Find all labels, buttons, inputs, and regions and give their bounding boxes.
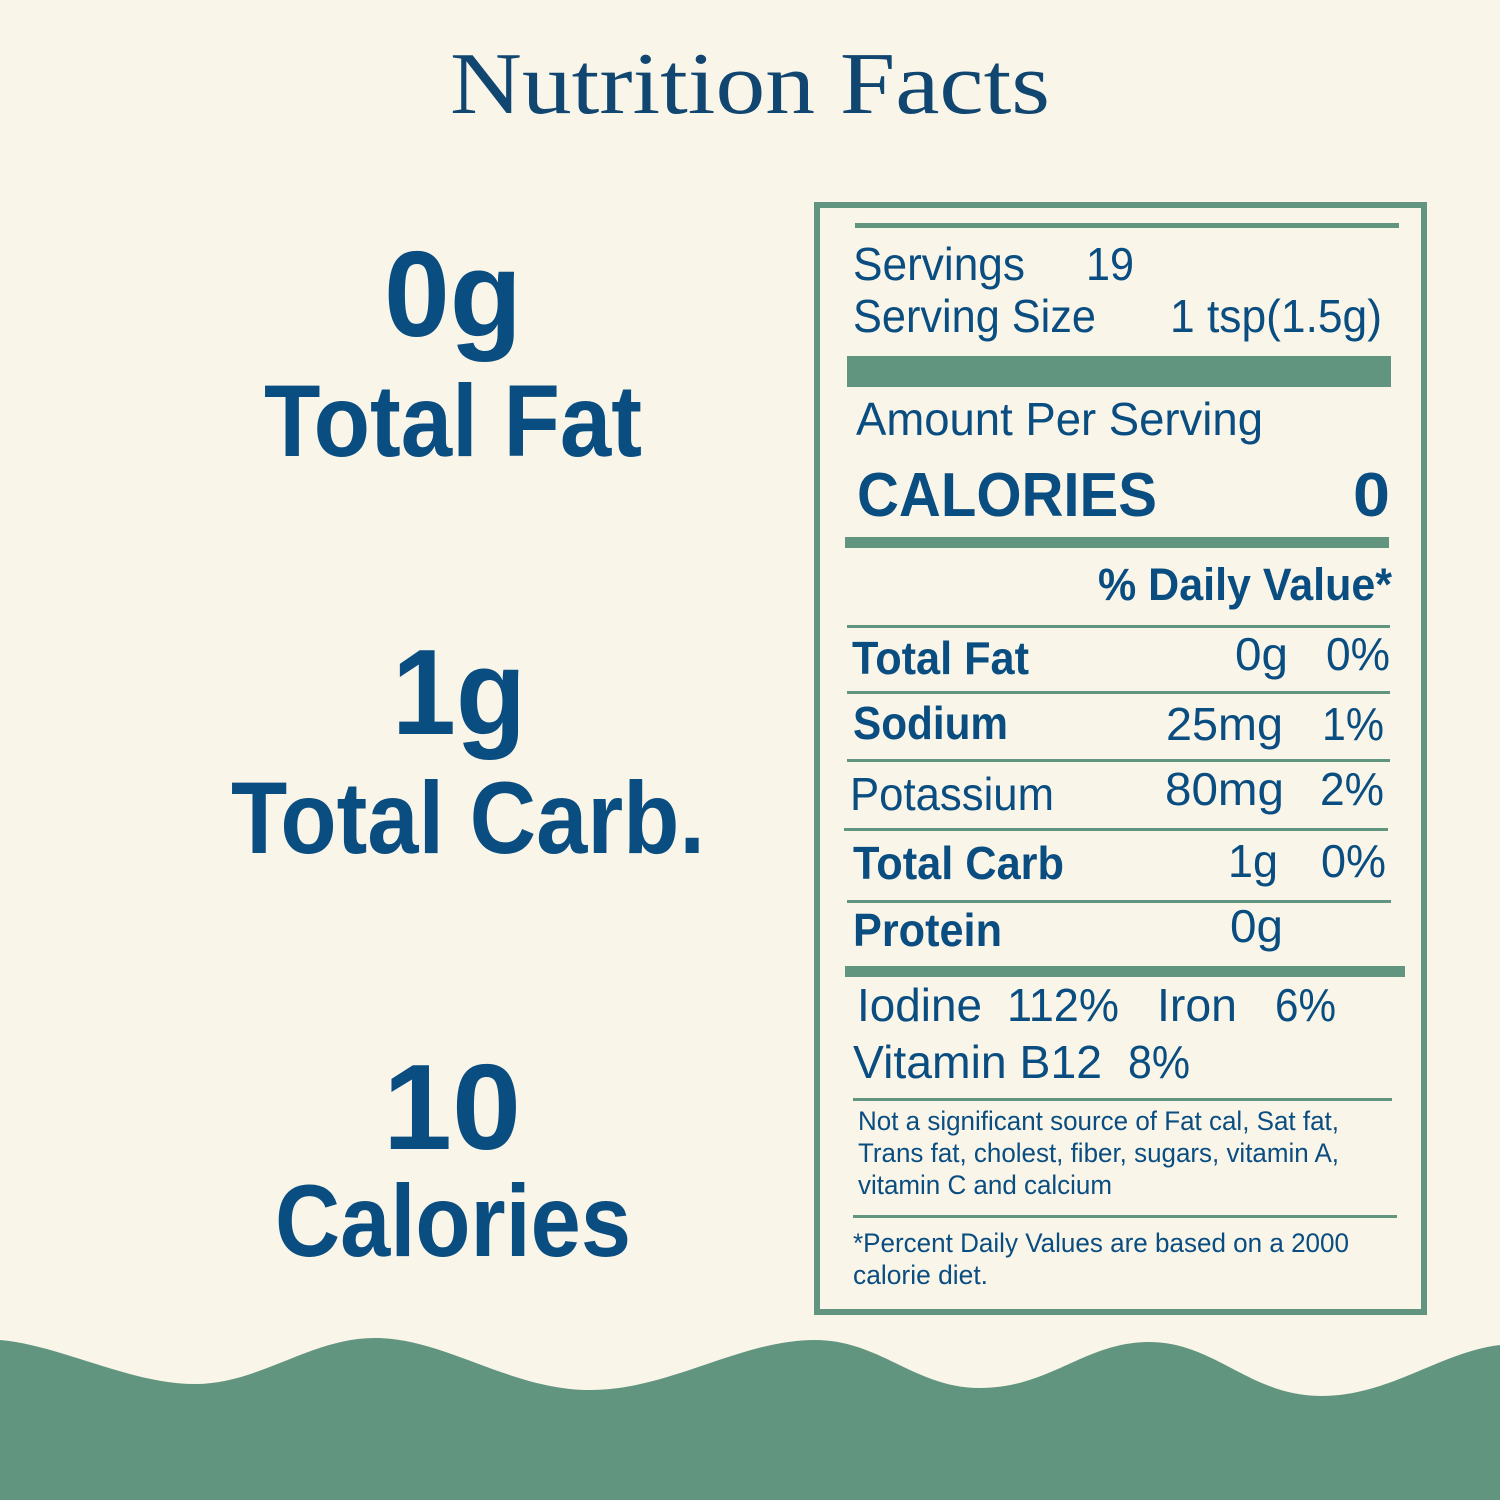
vitamins: Vitamin B12 — [853, 1036, 1102, 1088]
panel: nutrition label — [817, 205, 1424, 1312]
row: total fat: Total Fat — [852, 632, 1029, 684]
calories row: 0 — [1353, 461, 1390, 530]
amount per serving: Amount Per Serving — [856, 393, 1263, 445]
row: total carb: 0% — [1321, 835, 1386, 887]
footnote: not significant: Not a significant source of Fat cal, Sat fat, — [858, 1106, 1339, 1136]
vitamins: 112% — [1007, 979, 1119, 1031]
row: total carb: Total Carb — [853, 837, 1064, 889]
row: protein: 0g — [1230, 900, 1283, 952]
stat: total carb: 1g — [392, 624, 526, 760]
calories row — [857, 461, 1390, 530]
footnote: daily values: *Percent Daily Values are based on a 2000 — [853, 1228, 1349, 1258]
row: total carb: 1g — [1228, 835, 1278, 887]
stat: total carb: Total Carb. — [231, 761, 705, 875]
footnote: daily values: calorie diet. — [853, 1260, 988, 1290]
row: potassium: 80mg — [1165, 763, 1284, 815]
servings — [853, 238, 1382, 342]
row: protein — [853, 900, 1283, 956]
servings: 1 tsp(1.5g) — [1170, 290, 1382, 342]
servings: Serving Size — [853, 290, 1096, 342]
title: Nutrition Facts — [450, 36, 1050, 133]
stat: total fat — [264, 226, 642, 478]
label border — [817, 205, 1424, 1312]
footnote: not significant — [858, 1106, 1339, 1200]
footnote: not significant: vitamin C and calcium — [858, 1170, 1112, 1200]
row: potassium: Potassium — [850, 768, 1054, 820]
vitamins: 8% — [1128, 1036, 1190, 1088]
bottom wave — [0, 1338, 1500, 1500]
stat: calories: Calories — [275, 1164, 631, 1278]
calories row: CALORIES — [857, 461, 1157, 530]
servings: Servings — [853, 238, 1025, 290]
servings: 19 — [1086, 238, 1134, 290]
row: sodium: Sodium — [853, 697, 1008, 749]
stat: total carb — [231, 624, 705, 875]
row: sodium — [853, 697, 1384, 750]
vitamins: Iodine — [857, 979, 982, 1031]
row: total carb — [853, 835, 1386, 889]
stat: calories: 10 — [383, 1039, 521, 1175]
stat: calories — [275, 1039, 631, 1278]
stat: total fat: Total Fat — [264, 364, 642, 478]
vitamins: 6% — [1275, 979, 1336, 1031]
daily value heading: % Daily Value* — [1098, 559, 1392, 610]
row: total fat: 0g — [1235, 628, 1288, 680]
footnote: not significant: Trans fat, cholest, fiber, sugars, vitamin A, — [858, 1138, 1339, 1168]
vitamins: Iron — [1157, 979, 1237, 1031]
row: total fat: 0% — [1326, 628, 1390, 680]
stat: total fat: 0g — [384, 226, 522, 362]
row: potassium — [850, 763, 1384, 820]
vitamins — [853, 979, 1336, 1088]
row: sodium: 1% — [1322, 698, 1384, 750]
row: protein: Protein — [853, 904, 1002, 956]
row: total fat — [852, 628, 1390, 684]
row: sodium: 25mg — [1166, 698, 1283, 750]
footnote: daily values — [853, 1228, 1349, 1290]
row: potassium: 2% — [1320, 763, 1384, 815]
